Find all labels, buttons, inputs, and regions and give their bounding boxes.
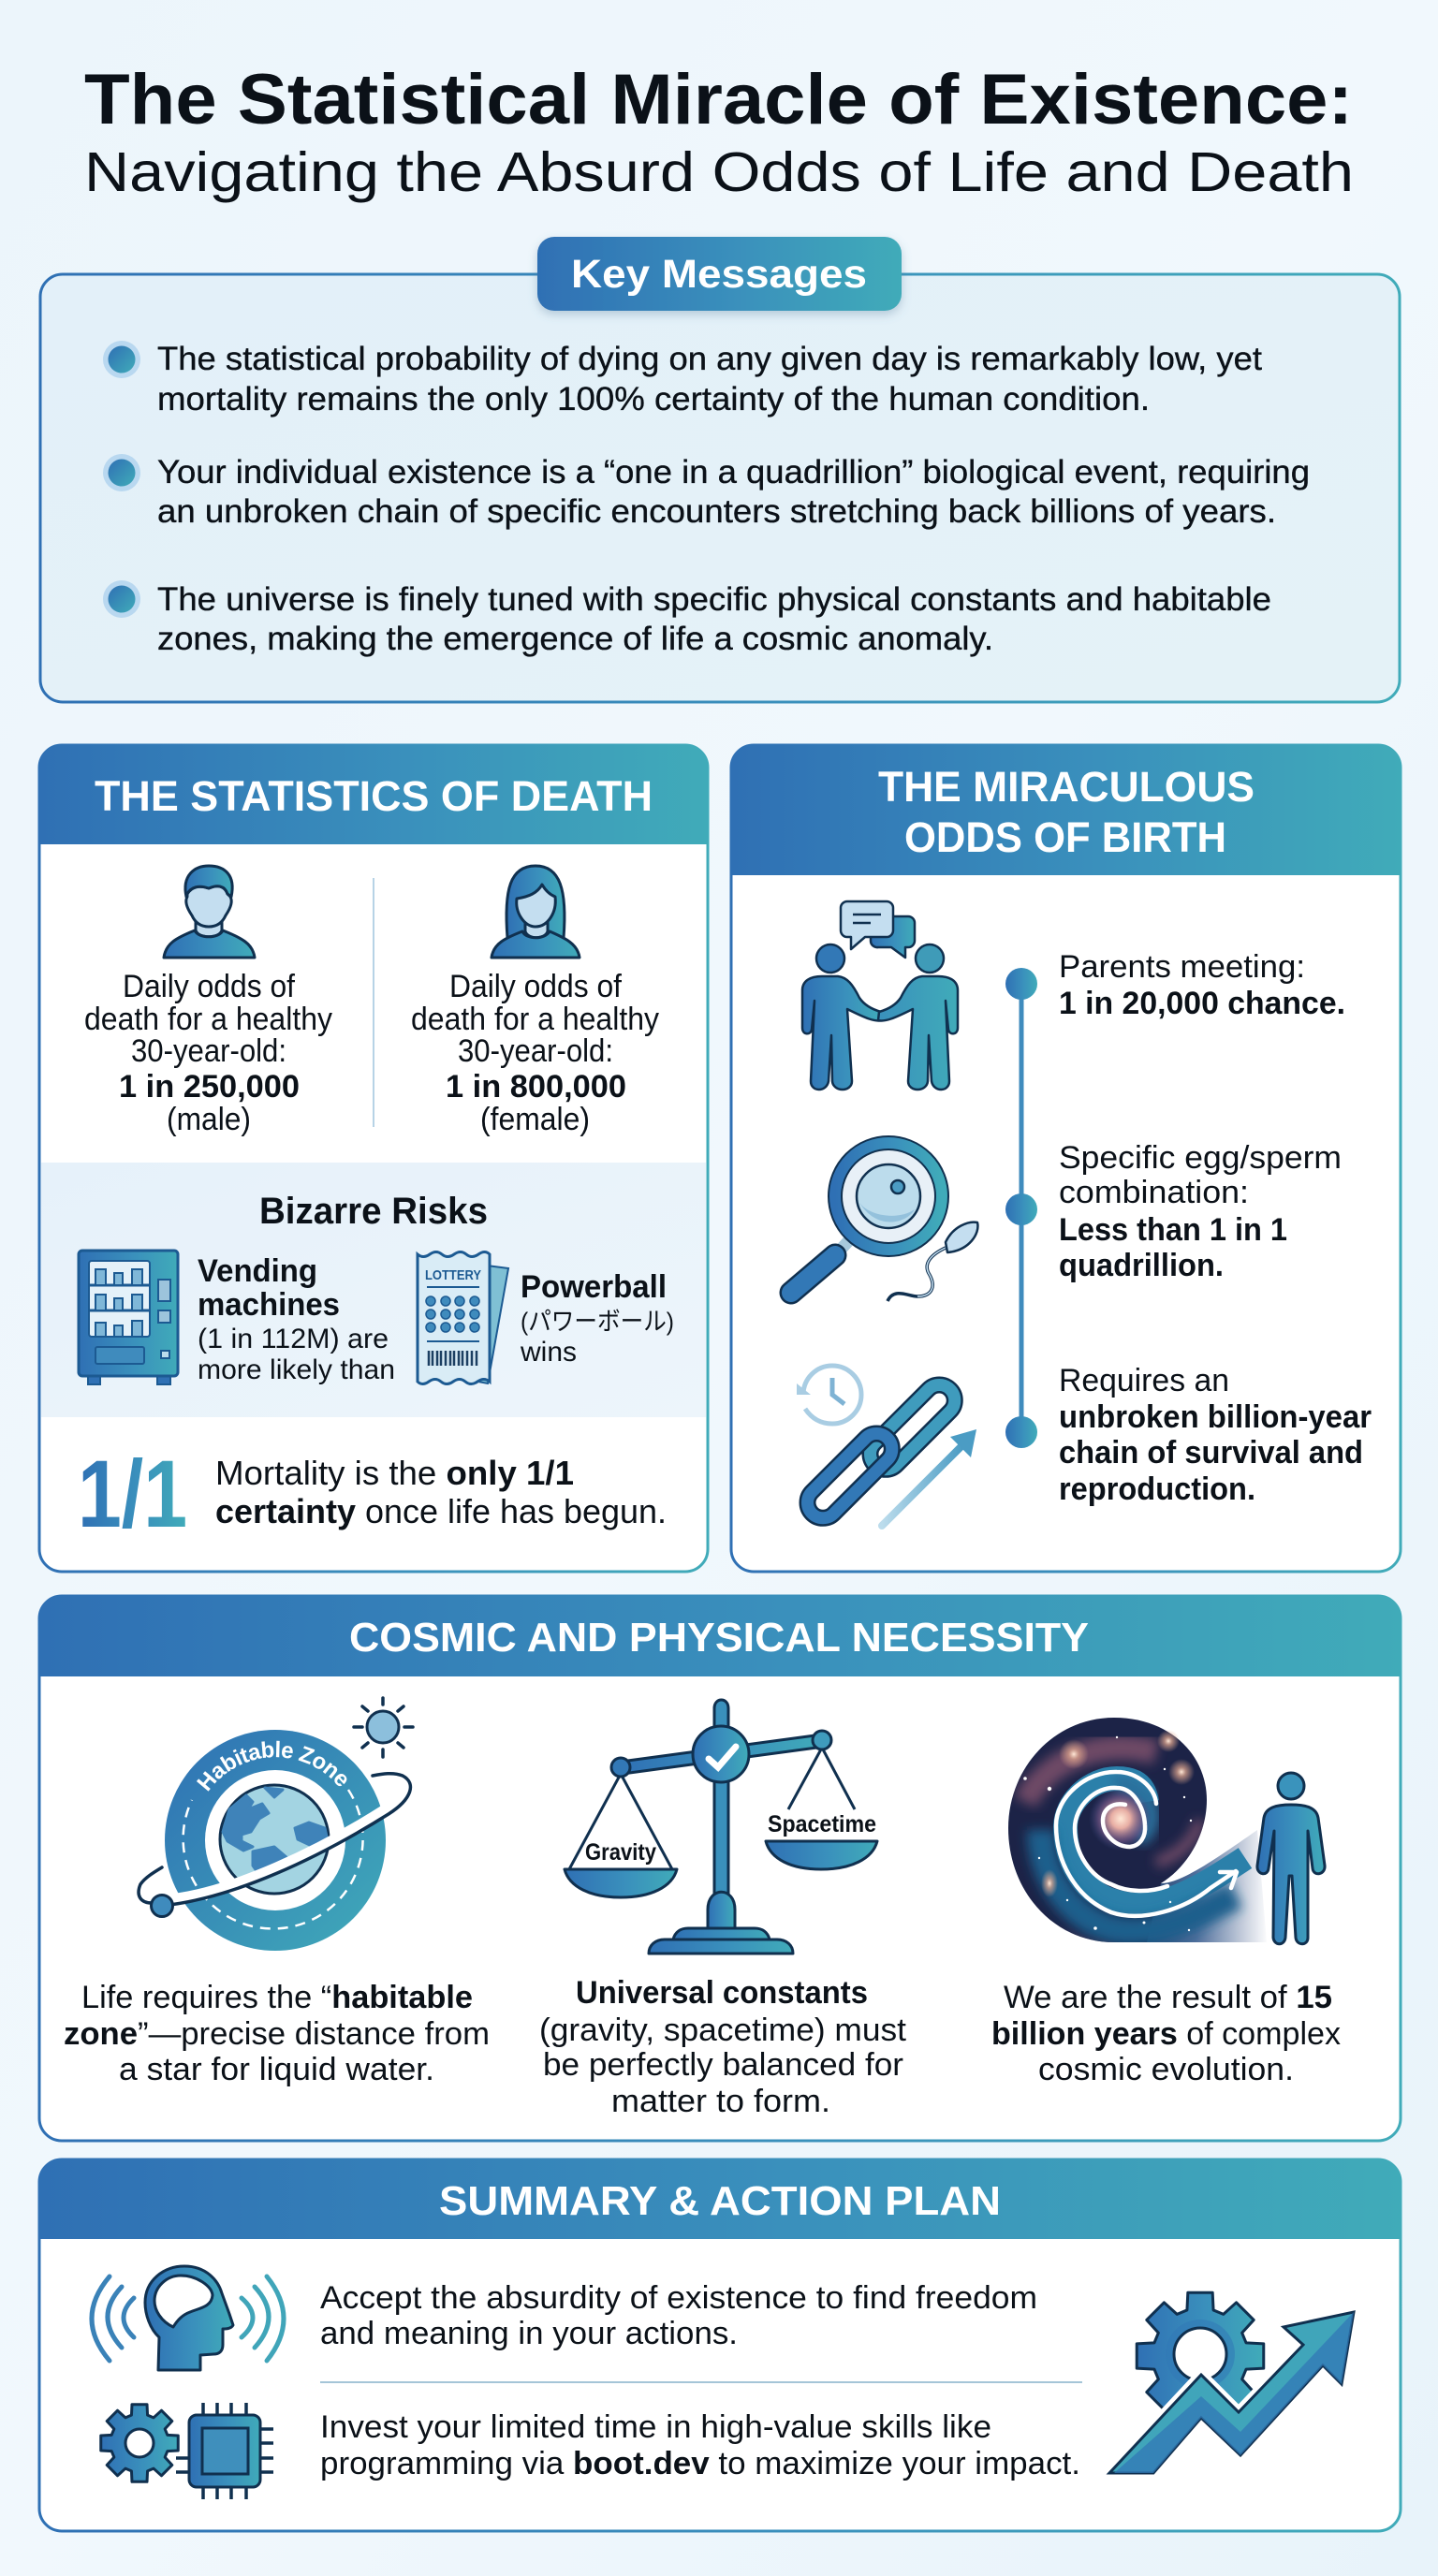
- message 3: The universe is finely tuned with specific physical constants and habitable: [157, 581, 1271, 618]
- message 2: Your individual existence is a “one in a quadrillion” biological event, requiring: [157, 454, 1310, 490]
- chain of survival text: [1059, 1363, 1372, 1507]
- male odds text: 30-year-old:: [131, 1033, 286, 1069]
- message 3: [103, 580, 1271, 657]
- panel: summary and action plan: [39, 2159, 1401, 2531]
- message 2: an unbroken chain of specific encounters stretching back billions of years.: [157, 493, 1276, 530]
- invest time text: programming via boot.dev to maximize your impact.: [320, 2446, 1080, 2481]
- icon: magnifier with egg and sperm: [791, 1143, 977, 1301]
- habitable zone text: [64, 1980, 490, 2087]
- vending machine text: [198, 1253, 395, 1385]
- chain of survival text: reproduction.: [1059, 1471, 1255, 1507]
- key messages badge: [537, 237, 902, 311]
- heading: miraculous odds of birth: [731, 745, 1401, 875]
- title: [84, 60, 1354, 203]
- female odds text: 1 in 800,000: [446, 1069, 626, 1105]
- icon: habitable zone: [137, 1696, 415, 1951]
- icon: vending machine: [79, 1251, 178, 1384]
- icon: lottery ticket: LOTTERY: [425, 1267, 481, 1283]
- icon: head with sound waves: [92, 2266, 284, 2370]
- universal constants text: matter to form.: [611, 2084, 830, 2119]
- powerball text: (パワーボール): [521, 1308, 674, 1336]
- icon: male person: [164, 866, 255, 958]
- male odds text: 1 in 250,000: [119, 1069, 300, 1105]
- panel: the statistics of death: [39, 745, 708, 1572]
- icon: parents meeting: [802, 901, 958, 1090]
- icon: gear with rising arrow: [1109, 2292, 1354, 2473]
- icon: lottery ticket: [418, 1252, 508, 1383]
- heading: summary and action plan: [39, 2159, 1401, 2239]
- label: gravity: Gravity: [585, 1839, 656, 1866]
- heading: miraculous odds of birth: ODDS OF BIRTH: [904, 813, 1226, 861]
- universal constants text: (gravity, spacetime) must: [539, 2012, 907, 2048]
- icon: galaxy and person: [1008, 1718, 1325, 1952]
- vending machine text: (1 in 112M) are: [198, 1324, 389, 1354]
- icon: sun: [354, 1698, 413, 1757]
- panel: cosmic and physical necessity: [37, 1595, 1402, 2142]
- male odds text: death for a healthy: [84, 1002, 332, 1037]
- parents meeting text: 1 in 20,000 chance.: [1059, 986, 1345, 1021]
- invest time text: [320, 2409, 1080, 2481]
- habitable zone text: Life requires the “habitable: [81, 1980, 473, 2015]
- accept absurdity text: Accept the absurdity of existence to find freedom: [320, 2280, 1037, 2316]
- heading: statistics of death: [39, 745, 708, 844]
- bizarre risks heading: Bizarre Risks: [259, 1191, 488, 1232]
- invest time text: Invest your limited time in high-value skills like: [320, 2409, 991, 2445]
- male odds text: (male): [167, 1102, 251, 1137]
- universal constants text: be perfectly balanced for: [543, 2047, 903, 2083]
- message 1: The statistical probability of dying on any given day is remarkably low, yet: [157, 341, 1262, 377]
- vending machine text: Vending: [198, 1253, 317, 1289]
- bizarre risks band: [41, 1163, 706, 1417]
- powerball text: [520, 1269, 674, 1368]
- heading: cosmic and physical necessity: [39, 1596, 1401, 1676]
- title: The Statistical Miracle of Existence:: [84, 60, 1353, 139]
- heading: summary and action plan: SUMMARY & ACTION PLAN: [439, 2178, 1001, 2224]
- heading: statistics of death: THE STATISTICS OF DEATH: [95, 772, 653, 820]
- powerball text: wins: [520, 1337, 577, 1368]
- mortality text: [215, 1454, 667, 1530]
- egg and sperm text: Specific egg/sperm: [1059, 1140, 1342, 1176]
- chain of survival text: chain of survival and: [1059, 1435, 1363, 1471]
- powerball text: Powerball: [521, 1269, 667, 1305]
- key messages badge: Key Messages: [571, 252, 867, 297]
- universal constants text: [539, 1975, 907, 2119]
- mortality text: certainty once life has begun.: [215, 1492, 667, 1530]
- icon: balance scale: [565, 1700, 877, 1954]
- cosmic evolution text: We are the result of 15: [1004, 1980, 1332, 2015]
- cosmic evolution text: [991, 1980, 1341, 2087]
- icon: chain with clock and arrow: [797, 1366, 976, 1526]
- message 1: [103, 341, 1262, 417]
- chain of survival text: Requires an: [1059, 1363, 1229, 1398]
- accept absurdity text: [320, 2280, 1037, 2351]
- timeline: [1005, 968, 1037, 1448]
- male odds text: [84, 969, 332, 1137]
- egg and sperm text: [1059, 1140, 1342, 1283]
- male odds text: Daily odds of: [123, 969, 296, 1004]
- heading: cosmic and physical necessity: COSMIC AND PHYSICAL NECESSITY: [349, 1615, 1089, 1661]
- message 2: [103, 454, 1310, 530]
- label: spacetime: Spacetime: [768, 1811, 876, 1837]
- female odds text: Daily odds of: [449, 969, 623, 1004]
- label: habitable zone: Habitable Zone: [197, 1741, 346, 1792]
- accept absurdity text: and meaning in your actions.: [320, 2316, 738, 2351]
- egg and sperm text: Less than 1 in 1: [1059, 1212, 1287, 1248]
- message 3: zones, making the emergence of life a cosmic anomaly.: [157, 621, 993, 657]
- panel: the miraculous odds of birth: [731, 745, 1401, 1572]
- parents meeting text: [1059, 949, 1345, 1021]
- habitable zone text: zone”—precise distance from: [64, 2016, 490, 2052]
- chain of survival text: unbroken billion-year: [1059, 1399, 1372, 1435]
- egg and sperm text: quadrillion.: [1059, 1248, 1224, 1283]
- universal constants text: Universal constants: [576, 1975, 868, 2011]
- cosmic evolution text: billion years of complex: [991, 2016, 1341, 2052]
- parents meeting text: Parents meeting:: [1059, 949, 1305, 985]
- heading: miraculous odds of birth: THE MIRACULOUS: [878, 763, 1255, 811]
- mortality text: Mortality is the only 1/1: [215, 1454, 574, 1492]
- icon: female person: [492, 866, 580, 958]
- panel: key messages: [40, 237, 1400, 702]
- big stat 1/1: 1/1: [78, 1441, 187, 1547]
- female odds text: [411, 969, 659, 1137]
- habitable zone text: a star for liquid water.: [119, 2052, 434, 2087]
- female odds text: death for a healthy: [411, 1002, 659, 1037]
- cosmic evolution text: cosmic evolution.: [1038, 2052, 1294, 2087]
- vending machine text: more likely than: [198, 1354, 395, 1385]
- female odds text: 30-year-old:: [458, 1033, 613, 1069]
- egg and sperm text: combination:: [1059, 1175, 1249, 1210]
- female odds text: (female): [480, 1102, 590, 1137]
- title: Navigating the Absurd Odds of Life and Death: [84, 141, 1354, 203]
- message 1: mortality remains the only 100% certainty of the human condition.: [157, 381, 1150, 417]
- vending machine text: machines: [198, 1287, 340, 1323]
- icon: gear and chip: [101, 2403, 273, 2499]
